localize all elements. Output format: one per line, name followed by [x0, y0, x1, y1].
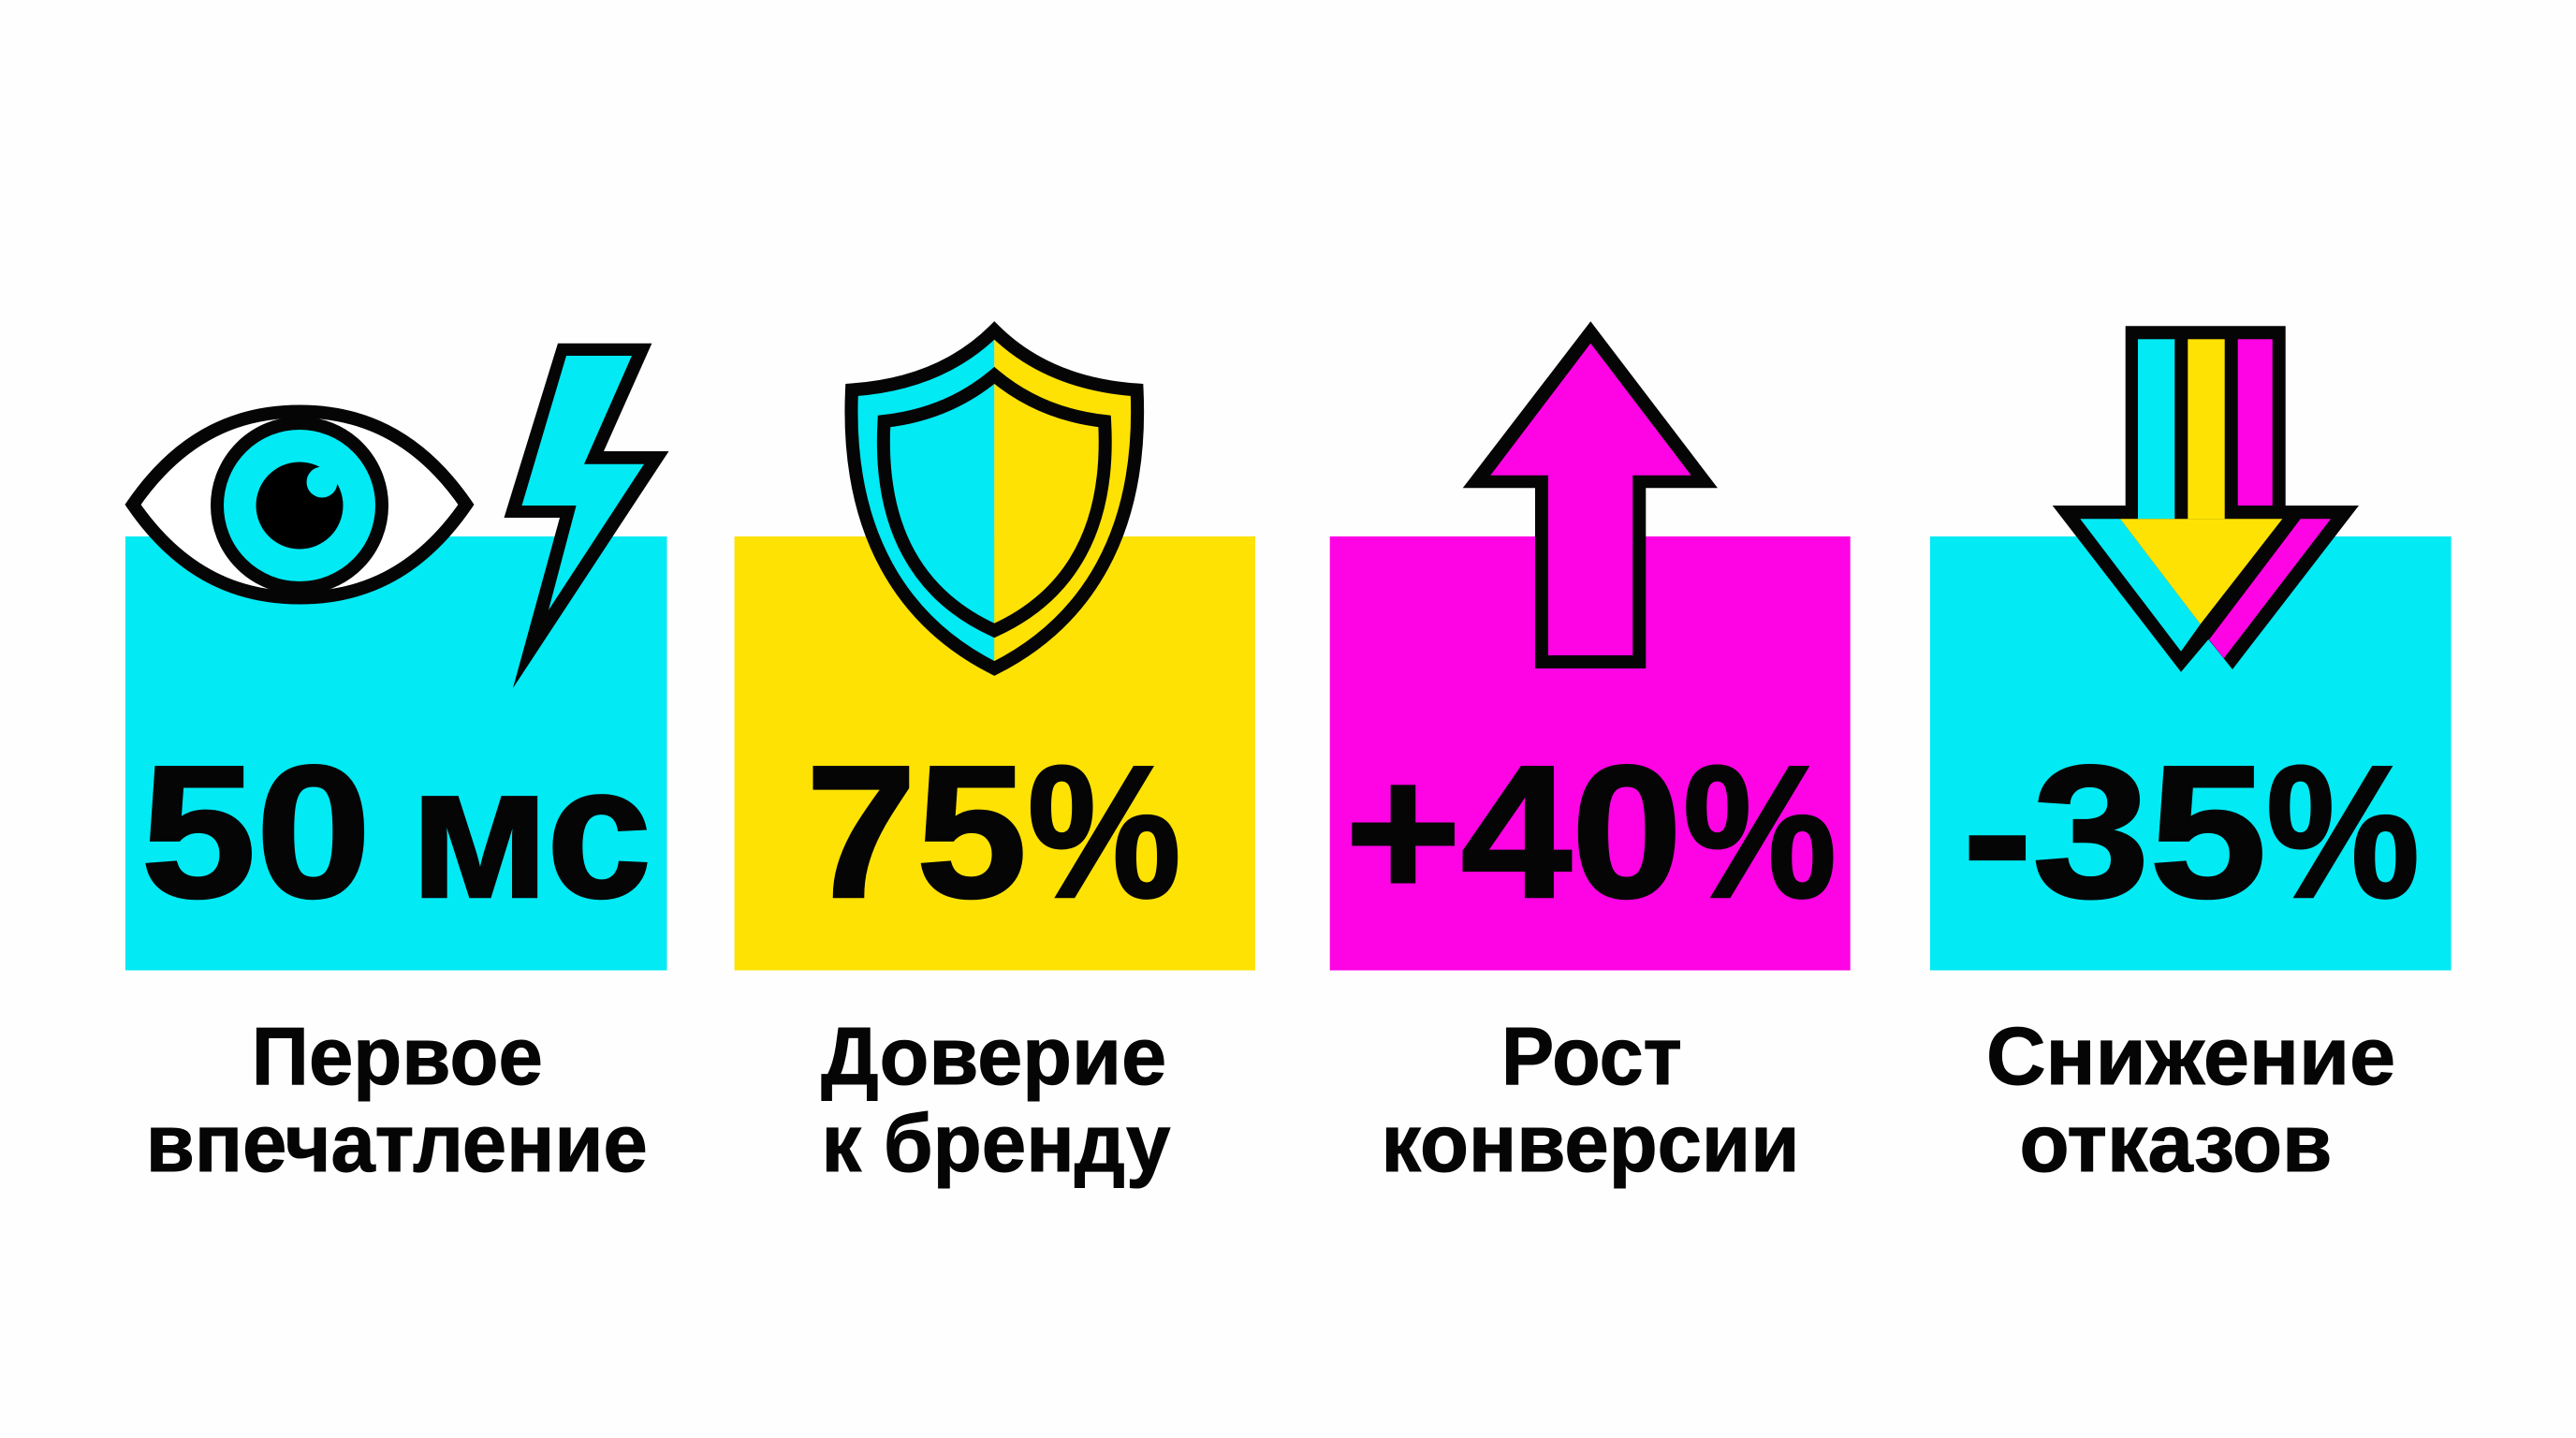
panel: first impression: [125, 344, 668, 1189]
cyan card: [1930, 536, 2452, 970]
icon: lightning bolt: [504, 344, 668, 688]
caption: first impression: впечатление: [146, 1098, 648, 1189]
cyan card: [125, 536, 666, 970]
panel: conversion growth: [1330, 321, 1851, 1189]
stat: plus 40 percent: +40: [1345, 726, 1682, 937]
stat: 75 percent: %: [1028, 726, 1181, 937]
caption: brand trust: к бренду: [822, 1098, 1170, 1189]
caption: bounce reduction: отказов: [2020, 1098, 2333, 1189]
caption: conversion growth: Рост: [1501, 1011, 1682, 1102]
icon: eye: [133, 412, 466, 597]
caption: brand trust: Доверие: [821, 1011, 1166, 1102]
icon: shield: [851, 330, 1137, 668]
stat: 75 percent: 75: [806, 726, 1027, 937]
magenta card: [1330, 536, 1851, 970]
icon: down arrow: [2053, 326, 2359, 672]
panel: bounce reduction: [1930, 326, 2452, 1189]
caption: bounce reduction: Снижение: [1986, 1011, 2395, 1102]
stat: 50 ms: 50: [140, 726, 371, 937]
caption: first impression: Первое: [252, 1011, 543, 1102]
yellow card: [735, 536, 1255, 970]
stat: plus 40 percent: %: [1683, 726, 1837, 937]
stat: 50 ms: мс: [410, 726, 651, 937]
stat: minus 35 percent: -35: [1962, 726, 2267, 937]
stat: minus 35 percent: %: [2266, 726, 2420, 937]
icon: up arrow: [1463, 321, 1718, 668]
panel: brand trust: [735, 330, 1255, 1189]
caption: conversion growth: конверсии: [1382, 1098, 1799, 1189]
